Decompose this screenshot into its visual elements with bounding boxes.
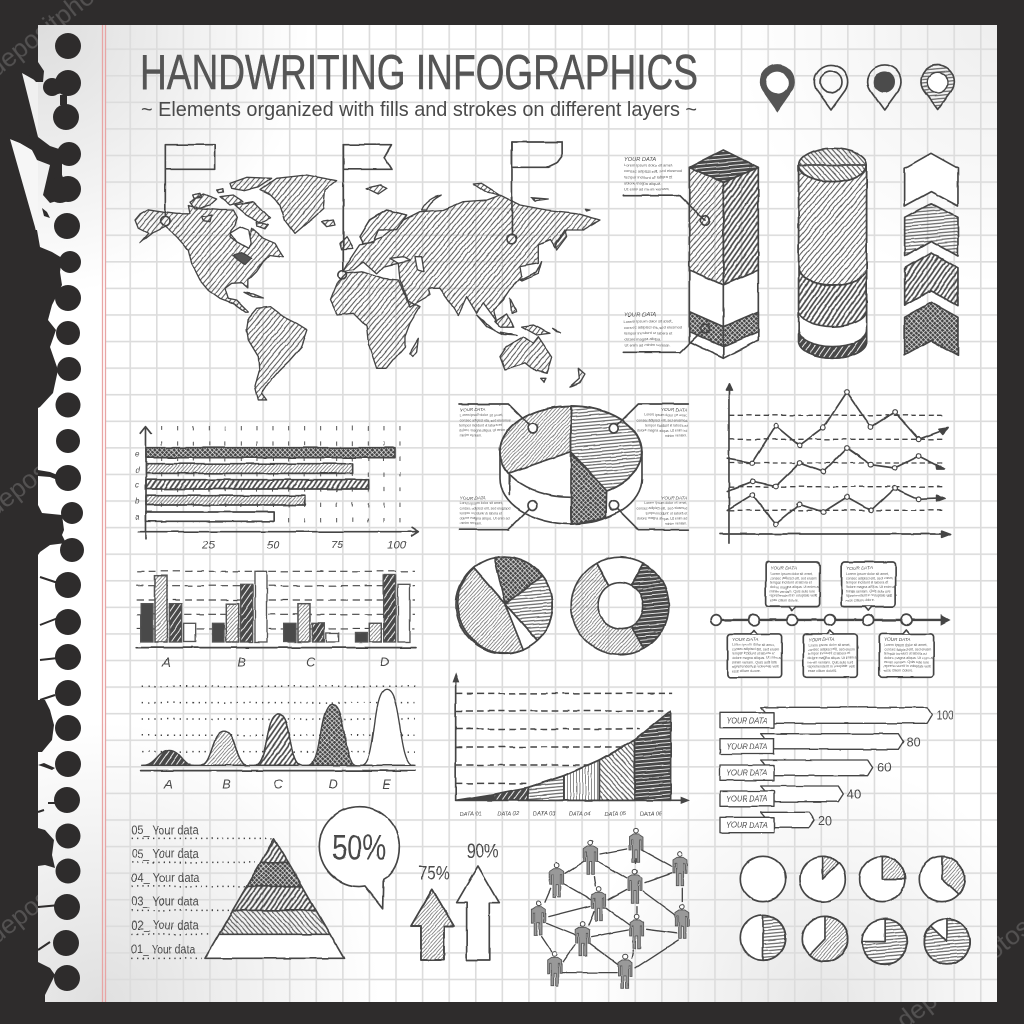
horizontal bar chart: d: [135, 466, 140, 475]
icon: solid pin: [761, 65, 794, 111]
arrow 75%: [411, 863, 454, 960]
bell curve chart: B: [222, 778, 231, 792]
world map: [135, 142, 600, 400]
area growth chart: DATA 02: [497, 812, 520, 818]
horizontal bar chart: [135, 426, 418, 551]
callout: pie bottom left: [459, 495, 537, 530]
horizontal bar chart: 25: [201, 539, 215, 551]
Scandinavia: [360, 210, 407, 243]
icon: dot pin: [868, 65, 901, 110]
horizontal bar chart: a: [135, 512, 140, 521]
timeline note 2: minim veniam. Quis aute iure: [846, 589, 891, 593]
area growth chart: DATA 04: [569, 812, 591, 818]
pyramid chart: 02_ Your data: [131, 918, 199, 933]
timeline note 2: YOUR DATA: [846, 566, 872, 571]
timeline note 5: dolore magna aliqua. Ut enim ad: [884, 656, 934, 660]
timeline note 2: consec adipisci elit, sed eiusm: [846, 576, 893, 580]
callout: pie top right: tempor incidunt ut labora et: [645, 424, 687, 428]
grouped column chart: B: [237, 656, 246, 670]
pyramid chart: 05_ Your data: [131, 846, 199, 861]
callout: pie bottom right: Lorem ipsum dolor sit amet,: [644, 501, 687, 505]
ribbon bar chart: [720, 707, 954, 833]
Caspian and Black Sea: [390, 257, 424, 272]
timeline note 3: reprehenderit in voluptate velit: [732, 665, 779, 669]
timeline: [711, 562, 951, 677]
grouped column chart: [137, 571, 416, 670]
ribbon bar chart: YOUR DATA: [727, 715, 767, 725]
Hudson Bay: [230, 227, 251, 248]
bell curve chart: [141, 686, 415, 792]
callout: lower column data: consec adipisci elit, sed eiusmod: [624, 325, 682, 330]
timeline note 5: [879, 630, 934, 677]
timeline note 2: reprehenderit in voluptate velit: [846, 594, 893, 598]
North America: [135, 205, 283, 312]
callout: pie top right: minim veniam.: [665, 434, 687, 438]
callout: pie bottom left: consec adipisci elit, sed eiusmod: [460, 506, 510, 510]
timeline note 4: consec adipisci elit, sed eiusm: [808, 647, 855, 651]
timeline note 4: [803, 630, 858, 677]
ribbon bar chart: YOUR DATA: [727, 820, 767, 830]
callout: lower column data: dolore magna aliqua.: [624, 337, 661, 342]
people network diagram: [531, 828, 689, 988]
callout: pie top left: minim veniam.: [460, 434, 482, 438]
timeline note 4: esse cillum dolore.: [808, 669, 837, 673]
callout: upper column data: tempor incidunt ut labora et: [624, 175, 673, 180]
bell curve chart: D: [328, 778, 337, 792]
callout: pie bottom left: tempor incidunt ut labora et: [460, 511, 502, 515]
flag: Russia: [507, 142, 562, 243]
arrow 90%: [457, 841, 499, 960]
callout: pie bottom right: minim veniam.: [665, 521, 687, 525]
timeline note 3: [727, 630, 782, 677]
pyramid chart: 01_ Your data: [131, 941, 196, 956]
timeline note 5: esse cillum dolore.: [884, 669, 913, 673]
donut chart: [571, 557, 669, 655]
timeline note 4: dolore magna aliqua. Ut enim ad: [808, 656, 858, 660]
callout: upper column data: [623, 157, 710, 225]
timeline note 3: Lorem ipsum dolor sit amet,: [732, 643, 775, 647]
pie chart: [456, 557, 553, 653]
callout: pie bottom right: consec adipisci elit, sed eiusmod: [637, 506, 687, 510]
Eurasia: [343, 195, 600, 322]
timeline note 2: Lorem ipsum dolor sit amet,: [846, 572, 889, 576]
ribbon bar chart: 100: [937, 708, 954, 723]
callout: pie top left: dolore magna aliqua. Ut enim ad: [460, 429, 510, 433]
icon: outline pin: [814, 65, 848, 110]
South America: [247, 307, 307, 400]
area growth chart: DATA 03: [533, 812, 556, 818]
Africa: [330, 272, 420, 368]
timeline note 1: Lorem ipsum dolor sit amet,: [770, 572, 813, 576]
timeline note 3: YOUR DATA: [732, 637, 758, 642]
timeline note 4: minim veniam. Quis aute iure: [808, 660, 853, 664]
timeline note 5: Lorem ipsum dolor sit amet,: [884, 643, 927, 647]
bell curve chart: E: [382, 778, 391, 792]
center and right charts: [456, 383, 951, 677]
callout: lower column data: Lorem ipsum dolor sit amet,: [624, 319, 673, 324]
3D pie chart: [459, 404, 688, 530]
Arctic islands: [190, 177, 272, 229]
location pin icons: [761, 65, 954, 111]
timeline note 2: [842, 562, 896, 611]
ribbon bar chart: 40: [847, 786, 861, 801]
Indonesia and islands: [322, 183, 590, 357]
timeline note 3: esse cillum dolore.: [732, 669, 761, 673]
pyramid chart: [131, 822, 344, 958]
timeline note 3: consec adipisci elit, sed eiusm: [732, 647, 779, 651]
callout: pie bottom left: Lorem ipsum dolor sit amet,: [460, 501, 503, 505]
area growth chart: [452, 672, 690, 818]
callout: pie bottom left: dolore magna aliqua. Ut enim ad: [460, 516, 510, 520]
timeline note 3: minim veniam. Quis aute iure: [732, 660, 777, 664]
callout: upper column data: Ut enim ad minim veniam.: [624, 187, 670, 192]
callout: upper column data: Lorem ipsum dolor sit amet,: [624, 163, 673, 168]
timeline note 5: minim veniam. Quis aute iure: [884, 660, 929, 664]
timeline note 2: tempor incidunt ut labora et: [846, 581, 888, 585]
callout: pie top right: Lorem ipsum dolor sit amet,: [644, 413, 687, 417]
timeline note 4: tempor incidunt ut labora et: [808, 652, 850, 656]
area growth chart: DATA 01: [460, 812, 482, 818]
callout: pie top left: Lorem ipsum dolor sit amet,: [460, 413, 503, 417]
timeline note 4: YOUR DATA: [808, 637, 834, 642]
bottom left group: [131, 807, 499, 960]
timeline note 3: dolore magna aliqua. Ut enim ad: [732, 656, 782, 660]
speech bubble 50%: 50%: [332, 828, 386, 867]
timeline note 5: reprehenderit in voluptate velit: [884, 665, 931, 669]
timeline note 5: consec adipisci elit, sed eiusm: [884, 647, 931, 651]
title: HANDWRITING INFOGRAPHICS: [140, 46, 698, 100]
pyramid chart: 04_ Your data: [131, 870, 200, 885]
3D box and cylinder group: [623, 148, 958, 358]
ribbon bar chart: 80: [907, 734, 921, 749]
Greenland: [260, 175, 337, 233]
callout: pie bottom right: dolore magna aliqua. Ut enim ad: [637, 516, 687, 520]
ribbon bar chart: YOUR DATA: [727, 794, 767, 804]
timeline note 2: esse cillum dolore.: [846, 598, 875, 602]
grouped column chart: D: [380, 656, 389, 670]
timeline note 1: tempor incidunt ut labora et: [770, 581, 812, 585]
callout: pie bottom right: [609, 495, 688, 530]
bell curve chart: C: [274, 778, 284, 792]
callout: pie bottom left: minim veniam.: [460, 521, 482, 525]
subtitle: ~ Elements organized with fills and strokes on different layers ~: [141, 99, 697, 121]
pyramid chart: 03_ Your data: [131, 894, 199, 909]
horizontal bar chart: 100: [387, 539, 407, 551]
grouped column chart: A: [161, 656, 171, 670]
icon: hatched pin: [921, 65, 954, 110]
Australia: [500, 337, 552, 373]
callout: pie top right: [609, 404, 688, 438]
timeline note 1: YOUR DATA: [770, 566, 796, 571]
chevrons: [905, 153, 958, 355]
callout: upper column data: YOUR DATA: [624, 157, 656, 163]
Caribbean: [244, 292, 263, 298]
callout: pie top left: YOUR DATA: [460, 407, 486, 412]
timeline note 1: dolore magna aliqua. Ut enim ad: [770, 585, 820, 589]
bell curve chart: A: [163, 778, 173, 792]
callout: pie top left: [459, 404, 537, 438]
flag: Spain: [338, 145, 392, 279]
timeline note 2: dolore magna aliqua. Ut enim ad: [846, 585, 896, 589]
line chart: [720, 383, 951, 543]
Novaya Zemlya: [422, 195, 442, 210]
timeline note 4: Lorem ipsum dolor sit amet,: [808, 643, 851, 647]
arrow 90%: 90%: [466, 841, 498, 862]
horizontal bar chart: 50: [267, 539, 280, 551]
ribbon bar chart: 60: [878, 760, 892, 775]
callout: pie bottom right: YOUR DATA: [661, 495, 687, 500]
area growth chart: DATA 06: [640, 812, 662, 818]
timeline note 1: consec adipisci elit, sed eiusm: [770, 576, 817, 580]
callout: pie top left: tempor incidunt ut labora et: [460, 424, 502, 428]
New Zealand and Tasmania: [541, 368, 585, 387]
ribbon bar chart: YOUR DATA: [727, 768, 767, 778]
timeline note 3: tempor incidunt ut labora et: [732, 652, 774, 656]
horizontal bar chart: e: [135, 450, 140, 459]
progress pie icons: [740, 856, 970, 964]
ribbon bar chart: 20: [818, 813, 832, 828]
timeline note 1: [766, 562, 820, 611]
horizontal bar chart: b: [135, 496, 140, 505]
pyramid chart: 05_ Your data: [131, 822, 199, 837]
arrow 75%: 75%: [418, 863, 450, 884]
area growth chart: DATA 05: [604, 812, 627, 818]
timeline note 1: reprehenderit in voluptate velit: [770, 594, 817, 598]
callout: lower column data: tempor incidunt ut labora et: [624, 330, 673, 335]
ribbon bar chart: YOUR DATA: [727, 742, 767, 752]
horizontal bar chart: 75: [331, 539, 344, 551]
callout: lower column data: [623, 313, 710, 352]
callout: pie top right: YOUR DATA: [661, 407, 687, 412]
callout: lower column data: YOUR DATA: [624, 313, 656, 319]
callout: upper column data: dolore magna aliqua.: [624, 180, 661, 185]
callout: pie bottom left: YOUR DATA: [460, 495, 486, 500]
3D column chart: [689, 150, 758, 358]
callout: pie top right: consec adipisci elit, sed eiusmod: [637, 418, 687, 422]
left column charts: [135, 426, 418, 792]
timeline note 5: YOUR DATA: [884, 637, 910, 642]
bottom right group: [531, 707, 970, 988]
callout: upper column data: consec adipisci elit, sed eiusmod: [624, 169, 682, 174]
callout: lower column data: Ut enim ad minim veniam.: [624, 343, 670, 348]
callout: pie top right: dolore magna aliqua. Ut enim ad: [637, 429, 687, 433]
callout: pie top left: consec adipisci elit, sed eiusmod: [460, 418, 510, 422]
horizontal bar chart: c: [135, 480, 139, 489]
speech bubble 50%: [319, 807, 399, 908]
timeline note 1: esse cillum dolore.: [770, 598, 799, 602]
timeline note 1: minim veniam. Quis aute iure: [770, 589, 815, 593]
timeline note 5: tempor incidunt ut labora et: [884, 652, 926, 656]
torn paper edge and punched holes: [0, 33, 84, 1002]
callout: pie bottom right: tempor incidunt ut labora et: [645, 511, 687, 515]
flag: Alaska: [161, 145, 215, 226]
timeline note 4: reprehenderit in voluptate velit: [808, 665, 855, 669]
grouped column chart: C: [306, 656, 316, 670]
Great Lakes: [233, 253, 252, 265]
3D cylinder chart: [799, 148, 867, 358]
